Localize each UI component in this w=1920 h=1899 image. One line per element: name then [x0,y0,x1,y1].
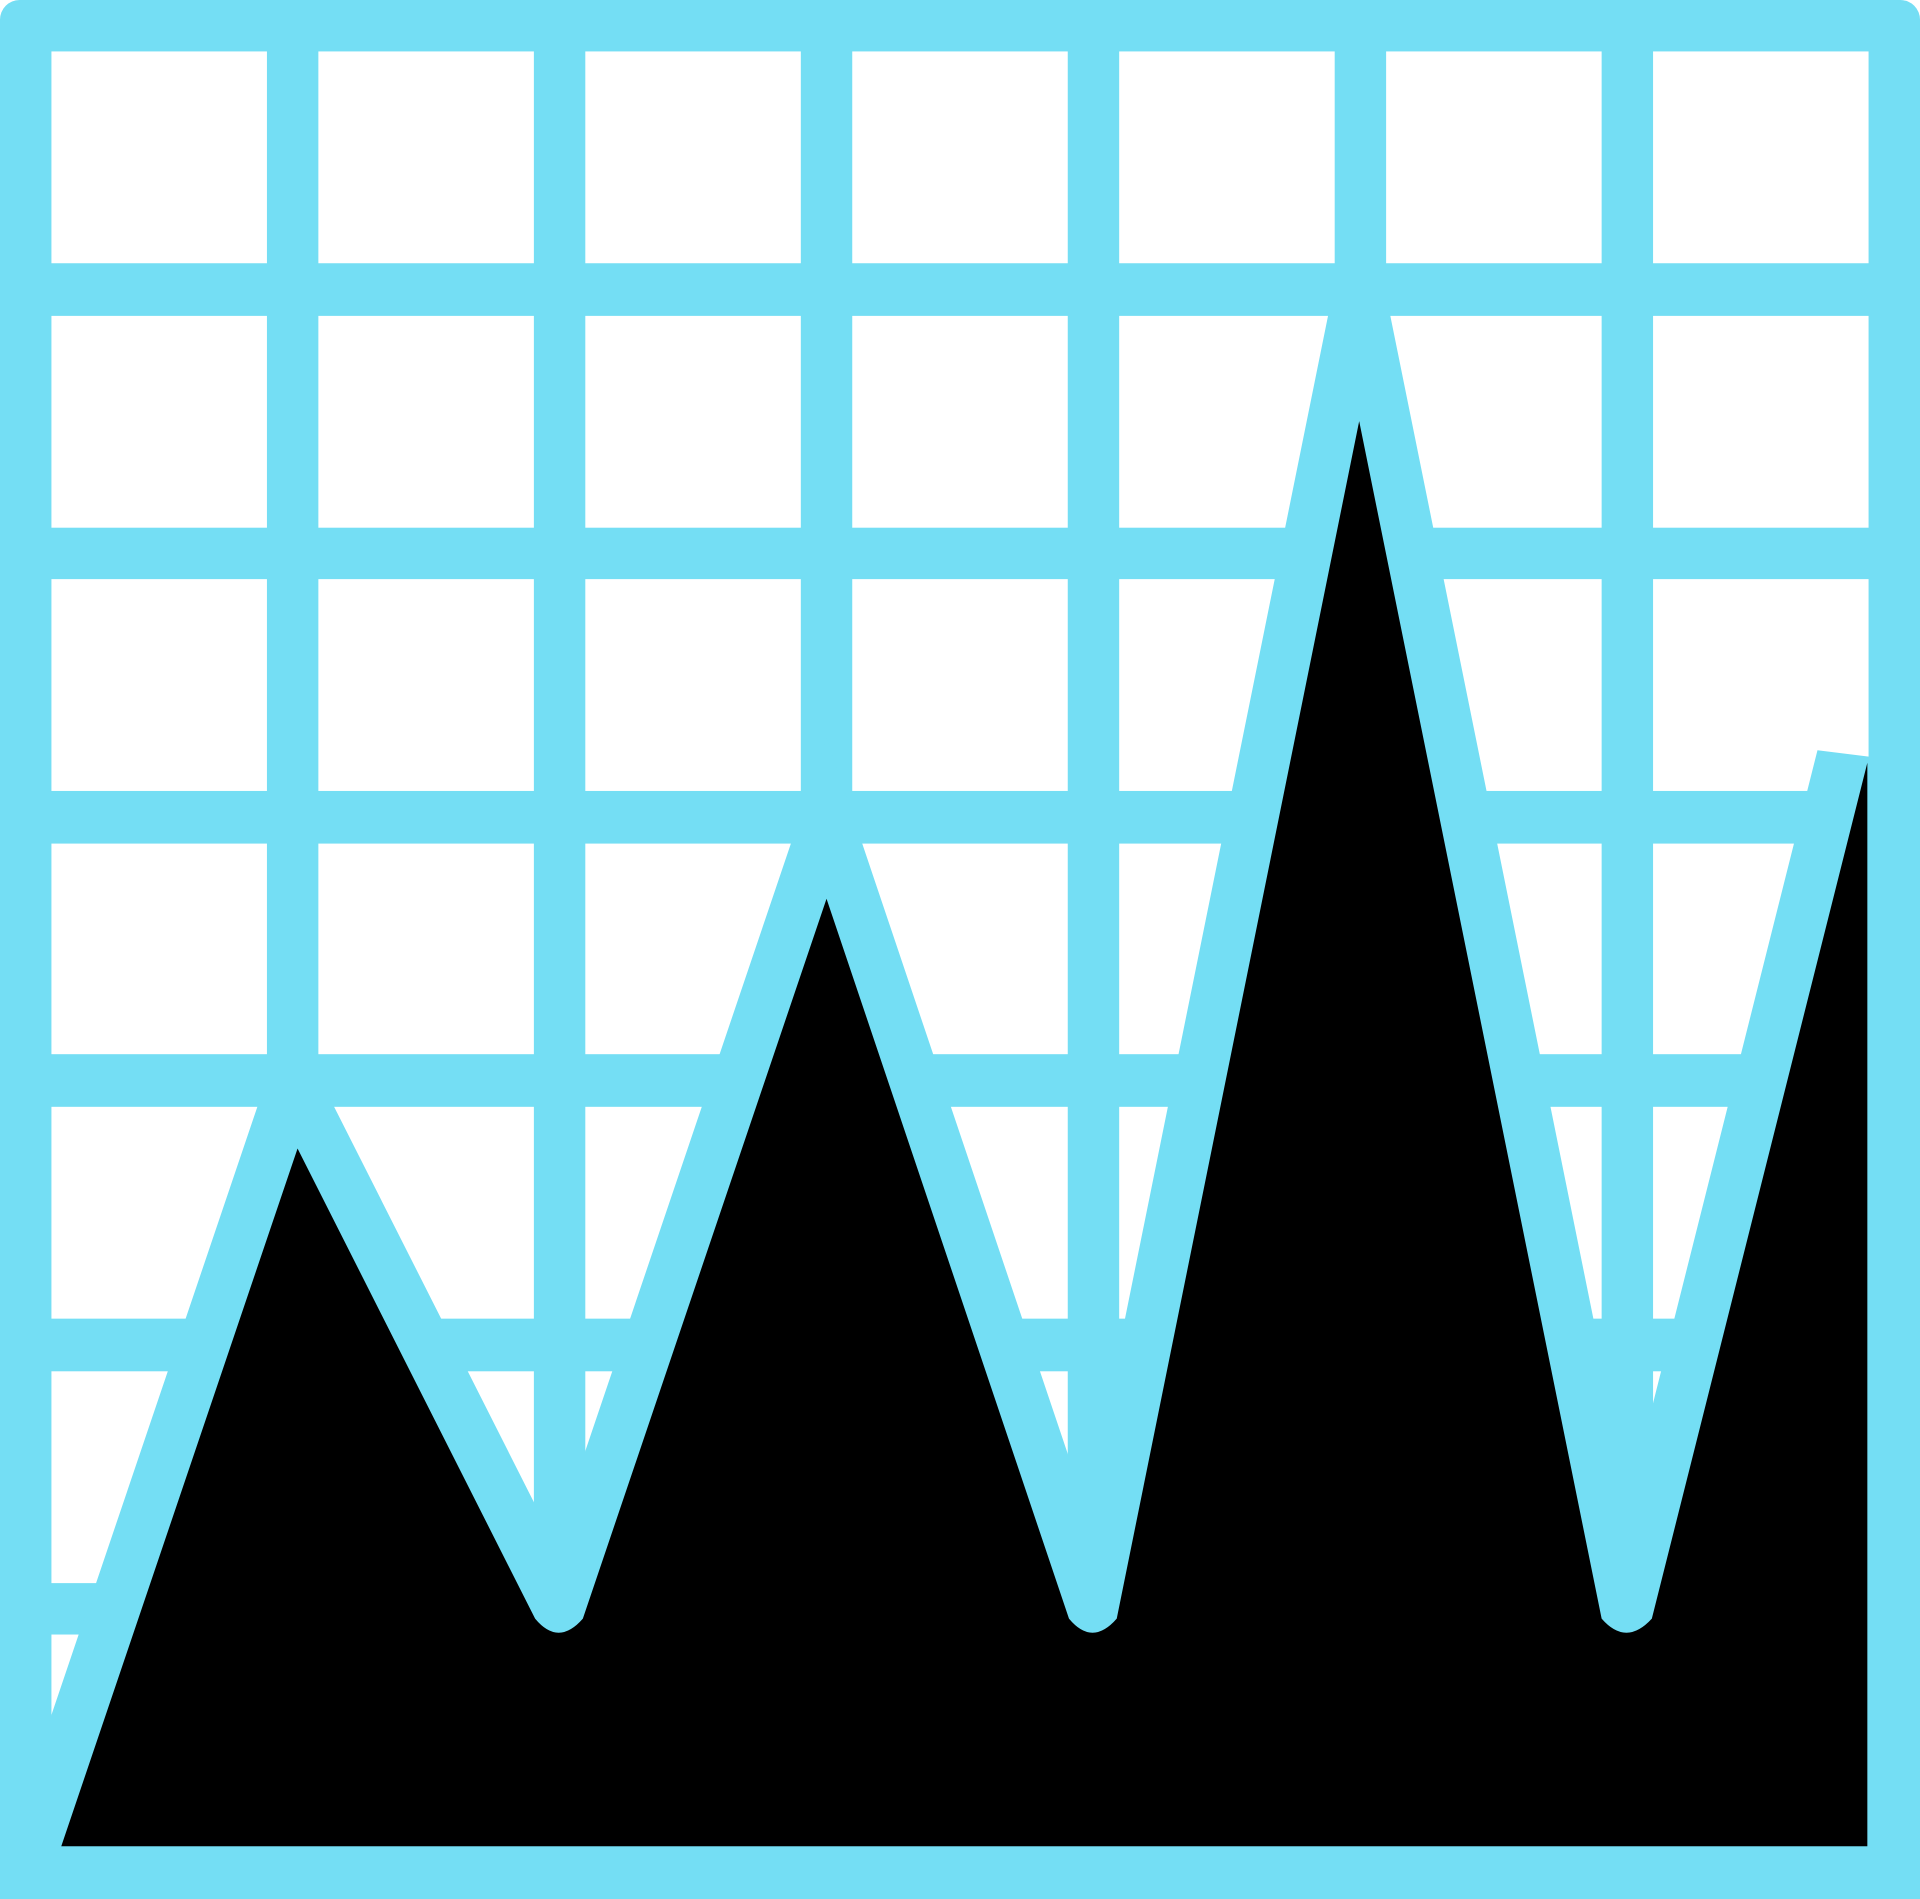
chart: black area with blue halo [61,421,1867,1846]
bottom and right border restore [0,1846,1920,1899]
